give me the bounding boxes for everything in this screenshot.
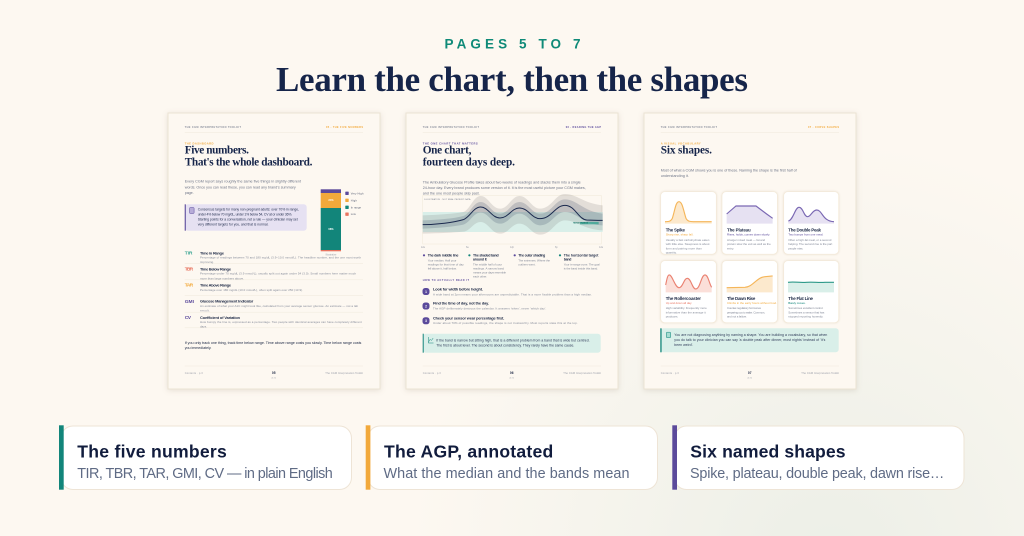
intro text: The Ambulatory Glucose Profile takes about two weeks of readings and stacks them into a single — [423, 180, 581, 184]
stacked bar chart: 24% — [328, 198, 334, 202]
step 3 — [422, 315, 578, 325]
page footer: Contents · p.3 — [185, 371, 203, 375]
legend: shaded band: each other. — [473, 275, 487, 279]
page header — [423, 126, 601, 132]
callout: consensus targets — [185, 204, 307, 231]
card: the plateau: Rises, holds, comes down slowly. — [727, 233, 770, 237]
metric: TIR: Percentage of readings between 70 and 180 mg/dL (3.9–10.0 mmol/L). The headline number, and the one most worth — [200, 256, 361, 260]
card: the spike: form and pairing more than — [666, 246, 702, 250]
chart time axis: 12p — [510, 246, 515, 249]
icon: note — [666, 332, 671, 338]
intro text: Every CGM report says roughly the same five things in slightly different — [185, 179, 301, 183]
legend: outer shading: outliers went. — [518, 262, 536, 266]
page footer: 06 — [510, 371, 514, 375]
step 1: Look for width before height. — [433, 286, 483, 291]
card: six named shapes: Six named shapes — [690, 442, 846, 462]
card: the plateau: A larger mixed meal — fat and — [727, 238, 765, 242]
card: the rollercoaster: The Rollercoaster — [666, 296, 701, 301]
eyebrow: pages 5 to 7: PAGES 5 TO 7 — [444, 36, 580, 52]
chart time axis: 12a — [421, 246, 426, 249]
card: the dawn rise: and not a failure. — [727, 314, 747, 318]
metric: TAR: Time Above Range — [200, 282, 232, 287]
page footer: 07 — [748, 371, 752, 375]
card: the rollercoaster: produces. — [666, 314, 678, 318]
page heading — [185, 141, 313, 168]
legend: shaded band: The middle half of your — [473, 263, 502, 267]
card: the flat line: stopped reporting honestly. — [788, 314, 823, 318]
page header — [661, 126, 839, 132]
callout: band meaning: The first is about level. The second is about consistency. They rarely have the same cause. — [436, 344, 574, 348]
chart time axis: 6a — [466, 246, 469, 249]
metric: CV: How bumpy the line is, expressed as a percentage. Two people with identical averages can have completely different — [200, 320, 362, 324]
metric: TIR: Time in Range — [200, 250, 225, 255]
step 1: 1 — [425, 290, 427, 294]
callout: vocabulary — [660, 328, 839, 352]
metric: GMI: GMI — [185, 299, 195, 305]
step 2: Find the time of day, not the day. — [433, 301, 489, 306]
intro text: understanding it. — [661, 174, 689, 178]
callout: consensus targets: under 4% below 70 mg/dL, under 1% below 54, CV at or under 36%. — [198, 212, 292, 216]
card: the rollercoaster: Up and down all day. — [666, 301, 692, 305]
icon: line chart — [428, 337, 434, 343]
legend: shaded band: The shaded band — [473, 254, 499, 258]
callout: consensus targets: Consensus targets for many non-pregnant adults: over 70% in range, — [198, 208, 299, 212]
card: the dawn rise: preparing you to wake. Common, — [727, 310, 765, 314]
card: the flat line — [784, 261, 839, 323]
metric: TBR: TBR — [185, 267, 194, 273]
metric: TBR: Time Below Range — [200, 266, 232, 271]
step 2: The AGP deliberately destroys the calendar. It answers 'when', never 'which day'. — [433, 307, 546, 311]
page footer: Contents · p.3 — [423, 371, 441, 375]
card: six named shapes — [672, 425, 964, 490]
page heading: THE ONE CHART THAT MATTERS — [423, 141, 478, 145]
intro text: 24-hour day. Every brand produces some version of it. It is the most useful picture your CGM makes, — [423, 186, 586, 190]
legend: median: The dark middle line — [428, 254, 458, 258]
metric: TAR: Percentage over 180 mg/dL (10.0 mmol/L), often split again over 250 (13.9). — [200, 288, 303, 292]
curve: rollercoaster — [666, 275, 712, 292]
card: the spike — [661, 192, 716, 255]
page footer — [423, 366, 601, 379]
card: the flat line: Sometimes excellent control. — [788, 306, 823, 310]
page header: THE CGM INTERPRETATION TOOLKIT — [661, 126, 717, 129]
panel: page 6, reading the AGP — [406, 113, 618, 389]
metric: GMI: Glucose Management Indicator — [200, 299, 254, 304]
card: the spike: The Spike — [666, 227, 686, 232]
chart legend — [345, 191, 364, 216]
metric: TIR: improving. — [200, 260, 214, 264]
callout: vocabulary: been weird'. — [674, 343, 693, 347]
page header: THE CGM INTERPRETATION TOOLKIT — [423, 126, 479, 129]
legend: shaded band: readings. A narrow band — [473, 267, 504, 271]
metric: TIR: TIR — [185, 251, 193, 257]
card: the plateau — [722, 192, 777, 254]
card: six named shapes: Spike, plateau, double peak, dawn rise… — [690, 466, 944, 482]
chart legend: High — [351, 198, 358, 202]
card: the flat line: Sometimes a sensor that has — [788, 310, 825, 314]
card: the AGP, annotated: The AGP, annotated — [384, 442, 553, 462]
panel: page 7, six shapes — [644, 113, 856, 389]
card: the five numbers: TIR, TBR, TAR, GMI, CV — in plain English — [77, 466, 333, 482]
metric: TIR — [185, 250, 361, 264]
card: the spike: Sharp rise, sharp fall. — [666, 233, 694, 237]
icon: document — [190, 208, 194, 214]
page heading: That's the whole dashboard. — [185, 156, 313, 168]
legend: outer shading: The extremes. Where the — [518, 258, 550, 262]
step 1: A wide band at 2pm means your afternoons are unpredictable. That is a more fixable problem than a high median. — [433, 292, 592, 296]
card: the five numbers: The five numbers — [77, 442, 227, 462]
band legend — [423, 254, 600, 279]
curve: dawn rise — [727, 276, 773, 292]
metric: CV: Coefficient of Variation — [200, 315, 241, 320]
legend: outer shading — [514, 254, 550, 266]
stacked bar chart: Illustrative — [326, 253, 337, 256]
page heading: A VISUAL VOCABULARY — [661, 141, 701, 145]
metric: CV: days. — [200, 325, 207, 329]
page heading: THE DASHBOARD — [185, 141, 213, 145]
page heading — [423, 141, 515, 168]
chart legend: Low — [351, 212, 356, 216]
card: the dawn rise: Counter-regulatory hormones — [727, 306, 762, 310]
page header: 07 · CURVE SHAPES — [808, 126, 839, 129]
metric: CV — [185, 315, 362, 329]
card: the double peak: Often a high-fat meal, or a second — [788, 238, 832, 242]
page footer: of 21 — [271, 377, 277, 379]
chart time axis — [421, 246, 604, 249]
legend: outer shading: The outer shading — [518, 254, 545, 258]
AGP chart: ILLUSTRATIVE · NOT REAL PATIENT DATA — [424, 198, 471, 201]
card: the spike: with little else. Steepness is about — [666, 242, 710, 246]
step 1 — [422, 286, 592, 296]
metric: TBR — [185, 266, 356, 280]
card: the rollercoaster — [661, 261, 716, 323]
curve: double peak — [788, 207, 834, 224]
legend: shaded band: around it — [473, 258, 488, 262]
page heading: Six shapes. — [661, 145, 712, 157]
card: the dawn rise: The Dawn Rise — [727, 296, 756, 301]
card: the rollercoaster: informative than the average it — [666, 310, 706, 314]
closing statement: If you only track one thing, track time below range. Time above range costs you slowly. Time below range costs — [185, 341, 362, 345]
page header: 05 · THE FIVE NUMBERS — [326, 126, 363, 129]
metric: TBR: more than large numbers above. — [200, 276, 244, 280]
step 3: Under about 70% of possible readings, the shape is not trustworthy. Most reports state this at the top. — [433, 321, 578, 325]
card: the double peak: The Double Peak — [788, 227, 822, 232]
intro text: and the one most people skip past. — [423, 192, 480, 196]
step 2 — [422, 301, 546, 311]
step 3: Check your sensor wear percentage first. — [433, 315, 504, 320]
card: the double peak — [784, 192, 839, 254]
intro text: Most of what a CGM shows you is one of these. Naming the shape is the first half of — [661, 168, 798, 172]
page header: THE CGM INTERPRETATION TOOLKIT — [185, 126, 241, 129]
callout: band meaning: If the band is narrow but sitting high, that is a different problem from a band that is wide but centred. — [436, 338, 590, 342]
legend: target band: is the band inside this band. — [564, 267, 598, 271]
metric: GMI — [185, 299, 358, 312]
page footer: of 21 — [747, 377, 753, 379]
card: the five numbers — [59, 425, 352, 490]
page footer: Contents · p.3 — [661, 371, 679, 375]
card: the plateau: entry. — [727, 246, 734, 250]
intro text — [185, 179, 301, 195]
curve: spike — [665, 202, 712, 224]
metric: TAR: TAR — [185, 283, 194, 289]
legend: median — [423, 254, 464, 271]
step 2: 2 — [425, 304, 427, 308]
card: the dawn rise: Climbs in the early hours without food. — [727, 301, 777, 305]
page footer: The CGM Interpretation Toolkit — [563, 371, 601, 375]
closing statement — [185, 341, 362, 350]
card: the AGP, annotated: What the median and the bands mean — [384, 466, 630, 482]
legend: shaded band: means your days resemble — [473, 271, 506, 275]
callout: vocabulary: you do talk to your clinician you can say 'a double peak after dinner, most nights' instead of 'it's — [674, 338, 826, 342]
metric: GMI: result. — [200, 308, 210, 312]
intro text — [661, 168, 798, 178]
page header — [185, 126, 363, 132]
intro text — [423, 180, 586, 196]
metric: CV: CV — [185, 315, 192, 321]
callout: band meaning — [423, 334, 601, 353]
legend: median: readings for that time of day — [428, 262, 464, 266]
card: the dawn rise — [722, 261, 777, 323]
intro text: words. Once you can read these, you can read any brand's summary — [185, 185, 296, 189]
card: the spike: quantity. — [666, 251, 677, 255]
card: the double peak: helping. The second rise is the part — [788, 242, 832, 246]
legend: median: Your median. Half your — [428, 258, 456, 262]
main title: Learn the chart, then the shapes — [276, 60, 748, 99]
AGP chart: TARGET RANGE — [573, 221, 589, 224]
legend: target band: band — [564, 258, 571, 262]
legend: median: fell above it, half below. — [428, 267, 457, 271]
card: the double peak: people miss. — [788, 246, 803, 250]
closing statement: you immediately. — [185, 346, 211, 350]
panel: page 5, the five numbers — [168, 113, 380, 389]
metric: TBR: Percentage under 70 mg/dL (3.9 mmol/L), usually split out again under 54 (3.0). Small numbers here matter much — [200, 272, 356, 276]
metric: TAR — [185, 282, 303, 292]
metric table — [185, 250, 363, 329]
card: the AGP, annotated — [366, 425, 658, 490]
callout: consensus targets: Starting points for a conversation, not a rule — your clinician may set — [198, 217, 298, 221]
intro text: page. — [185, 191, 194, 195]
stacked bar chart: 68% — [328, 227, 334, 231]
curve: flat line — [788, 282, 834, 292]
legend: target band: Your in-range zone. The goal — [564, 263, 600, 267]
chart legend: In range — [351, 205, 362, 209]
card: the plateau: The Plateau — [727, 227, 751, 232]
page heading: fourteen days deep. — [423, 156, 515, 168]
page footer: The CGM Interpretation Toolkit — [801, 371, 839, 375]
page footer — [185, 366, 363, 379]
metric: GMI: An estimate of what your A1C might look like, calculated from your average sensor glucose. An estimate — not a lab — [200, 304, 358, 308]
chart legend: Very High — [351, 191, 364, 195]
numbered steps — [422, 286, 592, 325]
card: the double peak: Two bumps from one meal. — [788, 233, 823, 237]
page heading: One chart, — [423, 145, 472, 157]
card: the plateau: protein slow the exit as well as the — [727, 242, 771, 246]
legend: target band — [559, 254, 600, 271]
page heading: Five numbers. — [185, 145, 249, 157]
page footer: The CGM Interpretation Toolkit — [325, 371, 363, 375]
page footer — [661, 366, 839, 379]
subheading: how to read it: HOW TO ACTUALLY READ IT — [423, 279, 469, 282]
curve: plateau — [727, 206, 773, 224]
callout: vocabulary: You are not diagnosing anything by naming a shape. You are building a vocabulary, so that when — [674, 333, 827, 337]
page header: 06 · READING THE AGP — [566, 126, 601, 129]
card: the flat line: Barely moves. — [788, 301, 806, 305]
AGP chart — [423, 194, 603, 244]
legend: shaded band — [468, 254, 506, 279]
callout: consensus targets: very different targets for you, and that is normal. — [198, 222, 268, 226]
page footer: 05 — [272, 371, 276, 375]
legend: target band: The horizontal target — [564, 254, 599, 258]
step 3: 3 — [425, 319, 427, 323]
card: the flat line: The Flat Line — [788, 296, 814, 301]
stacked bar chart — [321, 189, 341, 256]
page footer: of 21 — [509, 377, 515, 379]
chart time axis: 12a — [599, 246, 604, 249]
card: the spike: Usually a fast carbohydrate eaten — [666, 238, 710, 242]
card: the rollercoaster: High variability. Frequently more — [666, 306, 707, 310]
chart time axis: 6p — [555, 246, 558, 249]
